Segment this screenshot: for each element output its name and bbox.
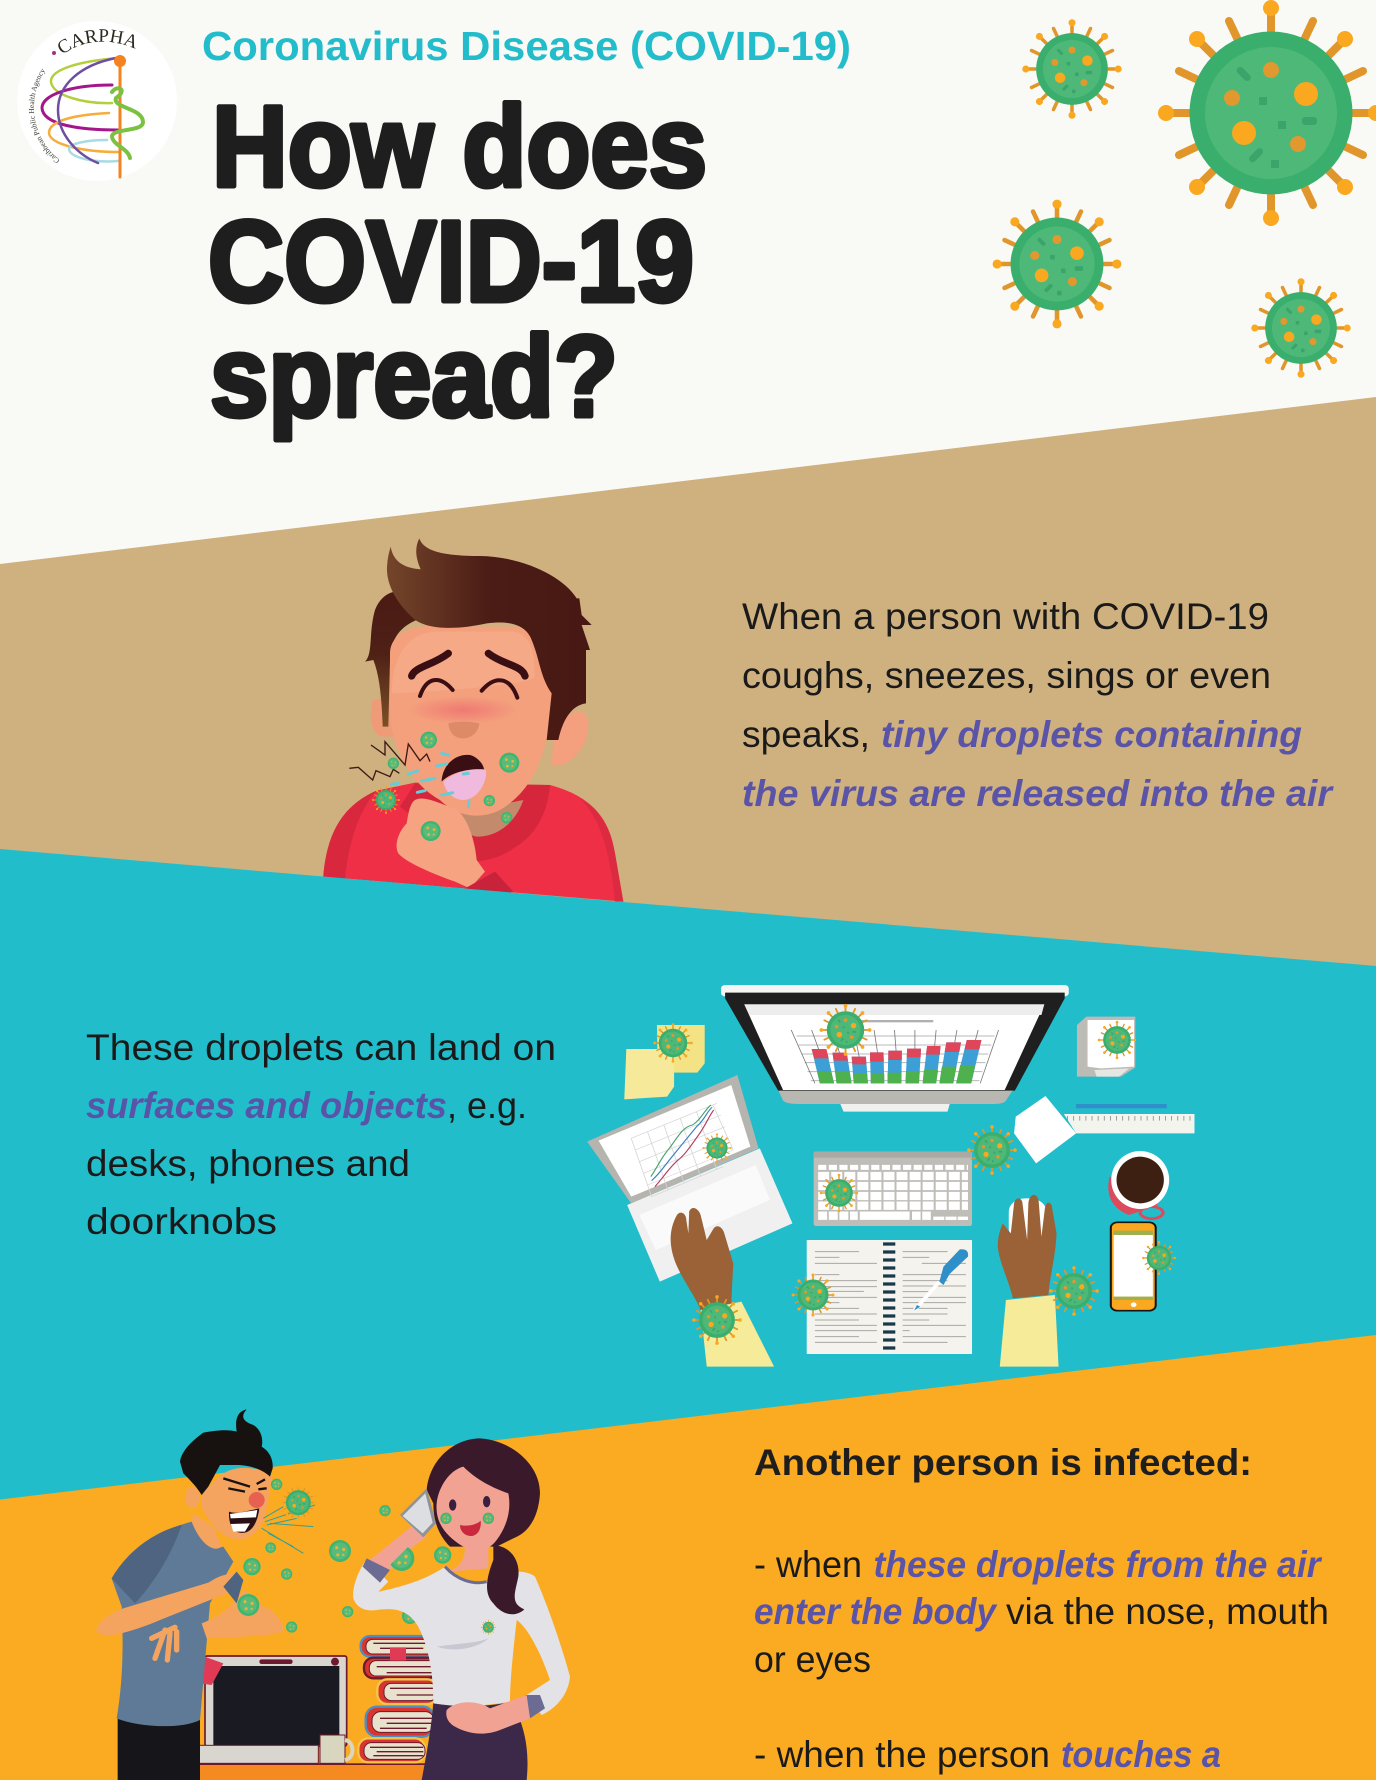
icons: viruses on surfaces [653,1004,1176,1345]
text: surfaces and objects [86,1027,556,1242]
logo: CARPHA: CARPHA [58,29,136,52]
text: how another person is infected [754,1442,1329,1775]
header [17,0,1376,442]
panel: droplets land on surfaces [0,849,1376,1510]
man [97,1409,315,1780]
ponytail [487,1545,524,1614]
illustration: coughing man [323,538,623,902]
text: droplets released [742,596,1335,814]
notebook and pen [807,1240,972,1354]
text: droplets released: coughs, sneezes, sings or even [742,655,1271,696]
icons: virus particles in the air [237,1479,451,1633]
bullet: touches a surface: - when the person [754,1734,1050,1775]
monitor [721,985,1069,1112]
left hand and sleeve [671,1208,774,1367]
text: surfaces and objects: These droplets can land on [86,1027,556,1068]
laptop [587,1075,792,1282]
text: surfaces and objects: desks, phones and [86,1143,410,1184]
text: surfaces and objects: surfaces and objects [86,1085,447,1126]
text: droplets released: the virus are released into the air [742,773,1335,814]
text: droplets released: tiny droplets containing [881,714,1302,755]
logo: CARPHA [17,21,177,181]
title: COVID-19 [208,198,694,326]
text: droplets released: When a person with COVID-19 [742,596,1269,637]
title [208,83,707,441]
stack of paper [1077,1017,1135,1077]
text: surfaces and objects: doorknobs [86,1201,277,1242]
ruler, pencil and note [1014,1096,1194,1163]
panel: another person is infected [0,1335,1376,1780]
text: surfaces and objects: , e.g. [447,1085,527,1126]
bullet: droplets enter the body: enter the body [754,1591,998,1632]
bullet: touches a surface: touches a [1061,1734,1221,1775]
bullet: droplets enter the body [754,1544,1329,1680]
logo: CARPHA: Caribbean Public Health Agency [28,68,59,163]
title: How does [212,83,707,211]
illustration: man sneezing on woman [97,1409,570,1780]
keyboard [814,1152,972,1226]
panel: coughing releases droplets [0,397,1376,975]
bullet: touches a surface [754,1734,1221,1775]
title: spread? [210,313,618,441]
illustration: desk with contaminated objects [587,985,1194,1367]
phone [1111,1222,1156,1311]
desk with laptop and books [198,1636,437,1780]
right hand, mouse and sleeve [998,1195,1059,1367]
woman [353,1438,570,1780]
sticky notes [624,1025,705,1099]
bullet: droplets enter the body: via the nose, mouth [1006,1591,1329,1632]
coffee cup [1108,1151,1169,1219]
bullet: droplets enter the body: - when [754,1544,862,1585]
text: droplets released: speaks, [742,714,870,755]
subtitle: Coronavirus Disease (COVID-19) [202,23,851,69]
icons: virus cluster [993,0,1376,378]
bullet: droplets enter the body: these droplets from the air [874,1544,1323,1585]
heading: another person is infected: Another person is infected: [754,1442,1252,1483]
bullet: droplets enter the body: or eyes [754,1639,871,1680]
